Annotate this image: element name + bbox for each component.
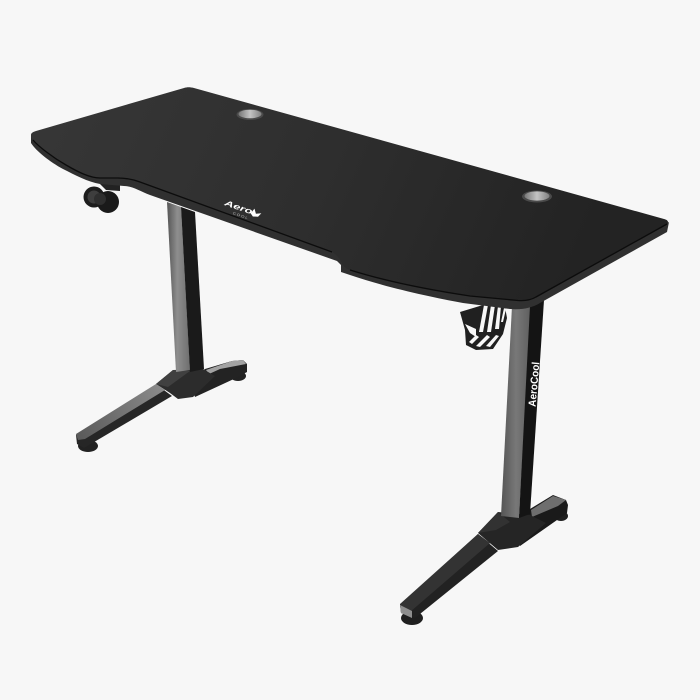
desktop logo: COOL: [232, 211, 249, 220]
desktop: [31, 87, 669, 309]
desktop top surface: [31, 87, 668, 301]
left leg front arm: [76, 384, 172, 448]
right leg hub: [478, 512, 546, 550]
desktop logo: [221, 198, 262, 224]
left leg foot pads: [78, 371, 246, 452]
left cable grommet: [236, 109, 264, 120]
logo leaf mark: [250, 208, 262, 219]
right leg front arm: [400, 534, 498, 618]
right leg rear arm: [515, 495, 568, 546]
brand text on leg: AeroCool: [527, 361, 542, 407]
right leg column: [501, 300, 544, 518]
cup holder slots: [465, 305, 506, 347]
right leg: [400, 300, 568, 625]
right cable grommet: [522, 190, 552, 202]
left leg column: [167, 202, 204, 372]
left leg: [76, 202, 247, 452]
desktop front highlight line: [33, 140, 667, 301]
desktop logo: Aero: [222, 198, 254, 217]
left leg rear arm: [190, 360, 247, 397]
cup holder: [460, 305, 507, 350]
headphone hook: [84, 184, 120, 213]
desktop edge: [31, 135, 669, 309]
left leg hub: [156, 369, 215, 399]
right leg foot pads: [401, 511, 568, 625]
